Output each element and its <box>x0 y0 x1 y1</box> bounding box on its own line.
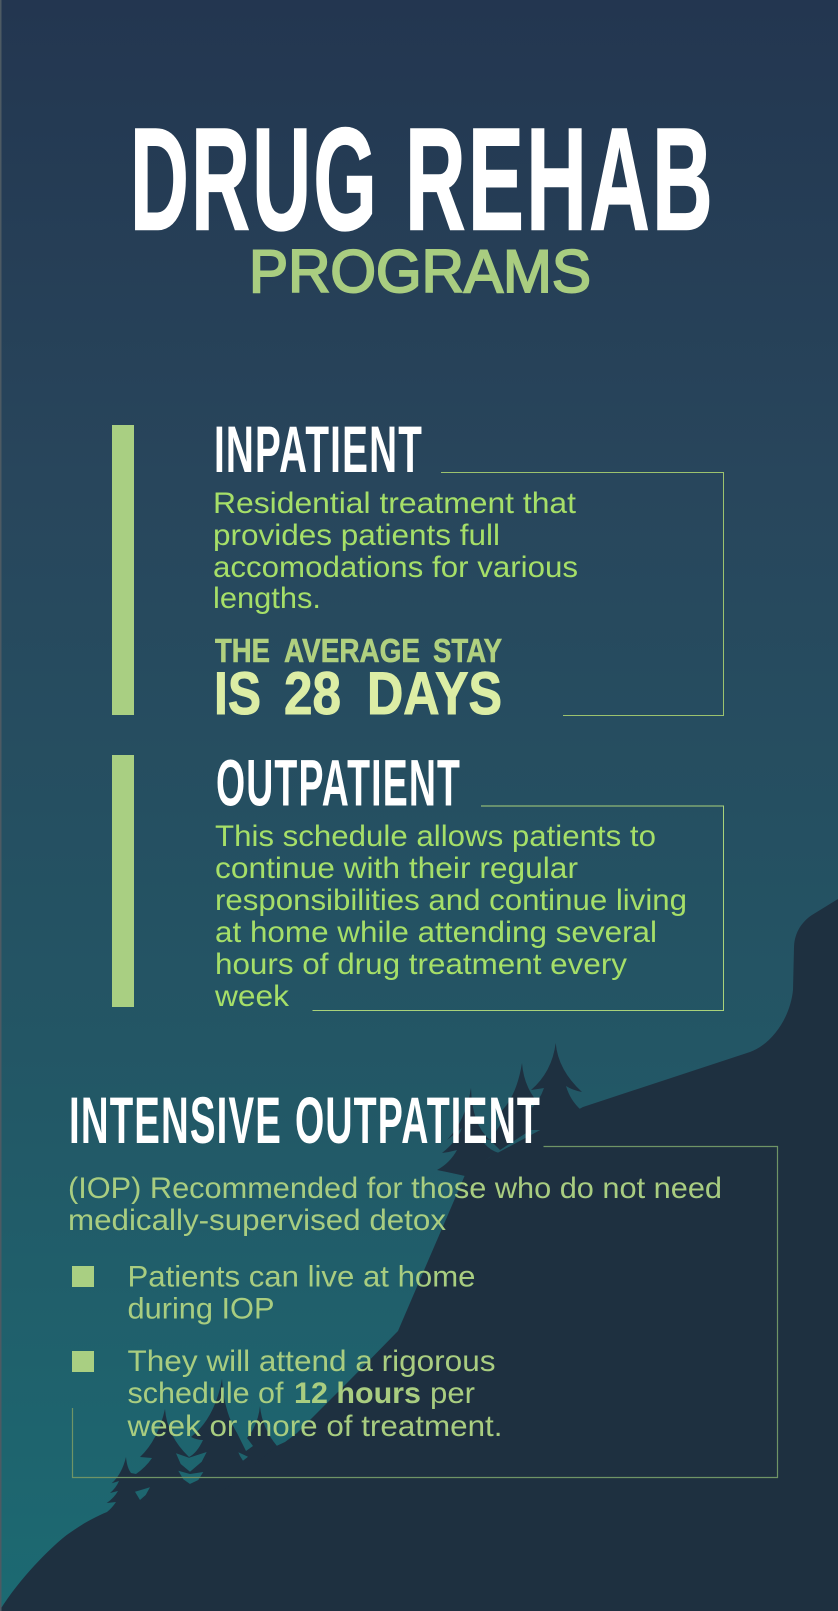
title line 2: PROGRAMS <box>249 238 591 305</box>
frame <box>441 472 724 716</box>
description: Residential treatment that <box>213 487 576 520</box>
stat line 1: STAY <box>433 632 502 669</box>
heading: OUTPATIENT <box>295 1083 541 1157</box>
panel: intensive outpatient <box>68 1083 778 1478</box>
accent bar <box>112 755 134 1007</box>
panel: inpatient <box>112 412 724 727</box>
bullet 2: They will attend a rigorous <box>128 1345 496 1378</box>
frame <box>72 1146 778 1478</box>
mountain silhouette <box>0 899 838 1611</box>
title <box>130 98 715 305</box>
bullet 2: 12 hours <box>294 1377 421 1410</box>
description <box>214 820 687 1013</box>
frame <box>312 806 724 1010</box>
bullet 2: schedule of <box>128 1377 284 1410</box>
description: accomodations for various <box>213 551 578 584</box>
bullet 1: during IOP <box>128 1292 274 1326</box>
bullet 1 <box>72 1260 476 1326</box>
heading: OUTPATIENT <box>216 746 461 820</box>
description: week <box>214 980 289 1013</box>
description: medically-supervised detox <box>68 1204 446 1237</box>
stat line 1: AVERAGE <box>284 632 420 669</box>
trees: lower ridge <box>107 1379 277 1512</box>
title line 1: DRUG <box>130 98 379 260</box>
bullet 1: Patients can live at home <box>128 1260 476 1294</box>
description: This schedule allows patients to <box>215 820 656 853</box>
description: lengths. <box>213 582 321 615</box>
heading: INPATIENT <box>214 412 423 486</box>
description: continue with their regular <box>215 852 578 885</box>
accent bar <box>112 425 134 715</box>
heading: INTENSIVE <box>69 1083 282 1157</box>
description: provides patients full <box>213 519 500 552</box>
stat line 2: IS <box>214 660 261 727</box>
stat line 2: 28 <box>284 660 341 727</box>
description <box>68 1172 722 1237</box>
bullet 2: per <box>430 1377 475 1410</box>
stat line 2: DAYS <box>367 660 502 727</box>
bullet 2 <box>72 1345 503 1443</box>
description: hours of drug treatment every <box>215 948 627 981</box>
description: at home while attending several <box>215 916 657 949</box>
bullet 2: week or more of treatment. <box>126 1410 503 1443</box>
description: (IOP) Recommended for those who do not need <box>68 1172 722 1205</box>
description: responsibilities and continue living <box>215 884 687 917</box>
trees: upper ridge <box>437 1043 582 1176</box>
stat line 1 <box>215 632 502 669</box>
stat line 2 <box>214 660 502 727</box>
stat line 1: THE <box>215 632 270 669</box>
panel: outpatient <box>112 746 724 1013</box>
description <box>213 487 578 615</box>
left edge line <box>0 0 2 1611</box>
